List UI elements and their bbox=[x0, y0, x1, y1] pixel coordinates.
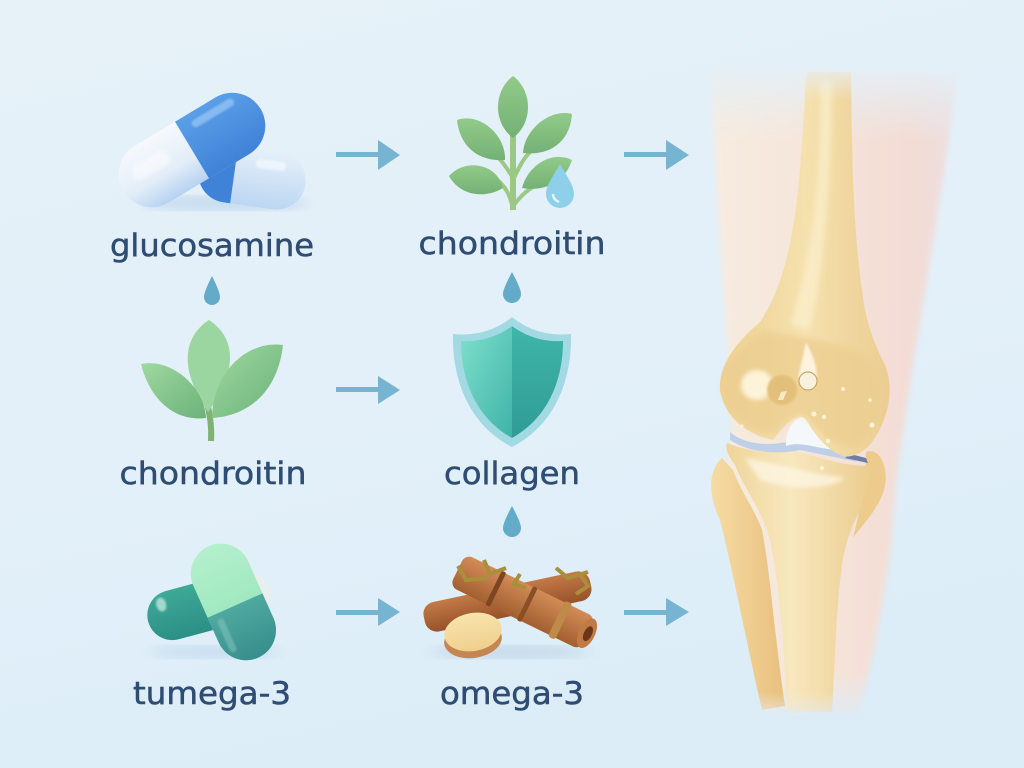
leg skin bbox=[711, 70, 958, 715]
label: glucosamine: glucosamine bbox=[110, 228, 314, 264]
femur highlights and shading bbox=[742, 332, 863, 446]
icon: plant with water drop bbox=[449, 76, 574, 210]
femur bbox=[720, 72, 890, 457]
illustration: knee joint bbox=[711, 70, 958, 715]
label: collagen: collagen bbox=[444, 456, 580, 492]
icon: drop above omega-3 bbox=[503, 506, 521, 537]
label: chondroitin top: chondroitin bbox=[418, 226, 606, 262]
icon: drop above collagen bbox=[503, 272, 521, 303]
label: omega-3: omega-3 bbox=[440, 676, 584, 712]
label: chondroitin middle: chondroitin bbox=[120, 456, 306, 492]
arrow: chondroitin to knee bbox=[624, 140, 689, 170]
icon: drop under glucosamine bbox=[204, 276, 220, 305]
icon: herbal bark and tablet bbox=[421, 552, 603, 662]
cartilage bbox=[730, 432, 858, 462]
label: tumega-3: tumega-3 bbox=[133, 676, 291, 712]
icon: shield bbox=[453, 317, 571, 447]
icon: three leaf sprig bbox=[141, 320, 283, 441]
arrow: tumega-3 to omega-3 bbox=[336, 598, 400, 626]
icon: teal capsules bbox=[142, 534, 286, 670]
arrow: omega-3 to knee bbox=[624, 598, 689, 626]
arrow: chondroitin to collagen bbox=[336, 376, 400, 404]
icon: glucosamine capsules bbox=[106, 81, 310, 219]
right fibula head bbox=[853, 451, 886, 538]
tibia bbox=[726, 443, 869, 712]
arrow: glucosamine to chondroitin bbox=[336, 140, 400, 170]
fibula bbox=[711, 458, 785, 710]
